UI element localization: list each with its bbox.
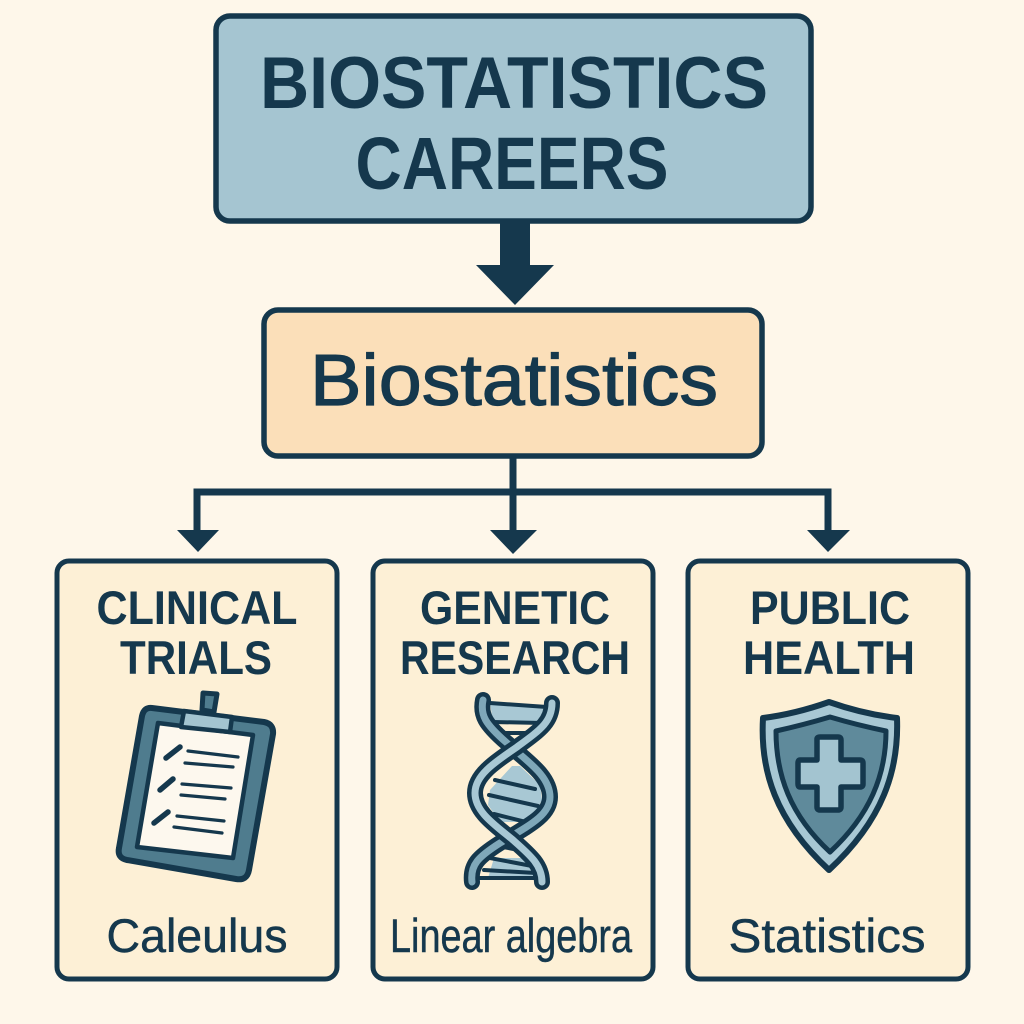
title text	[260, 43, 768, 205]
heading: genetic research: RESEARCH	[400, 631, 630, 684]
heading: genetic research	[400, 581, 630, 684]
label: calculus: Caleulus	[106, 909, 288, 962]
branching connector arrows	[177, 456, 850, 554]
box label: Biostatistics	[310, 341, 718, 421]
icon: clipboard	[119, 693, 273, 879]
title text: CAREERS	[356, 122, 668, 205]
label: linear algebra: Linear algebra	[390, 909, 633, 962]
title box	[216, 16, 811, 221]
heading: public health: PUBLIC	[750, 581, 910, 634]
panel: public health	[688, 561, 968, 979]
heading: clinical trials: TRIALS	[120, 631, 272, 684]
arrow: title to biostatistics	[476, 222, 554, 305]
heading: clinical trials	[96, 581, 298, 684]
panel: clinical trials	[57, 561, 337, 979]
icon: shield with cross	[763, 702, 897, 870]
box: biostatistics	[264, 310, 762, 456]
heading: clinical trials: CLINICAL	[96, 581, 298, 634]
panel: genetic research	[373, 561, 653, 979]
label: statistics: Statistics	[728, 909, 926, 962]
icon: dna helix	[472, 700, 552, 882]
title text: BIOSTATISTICS	[260, 43, 768, 124]
heading: public health: HEALTH	[743, 631, 915, 684]
heading: public health	[743, 581, 915, 684]
heading: genetic research: GENETIC	[420, 581, 610, 634]
